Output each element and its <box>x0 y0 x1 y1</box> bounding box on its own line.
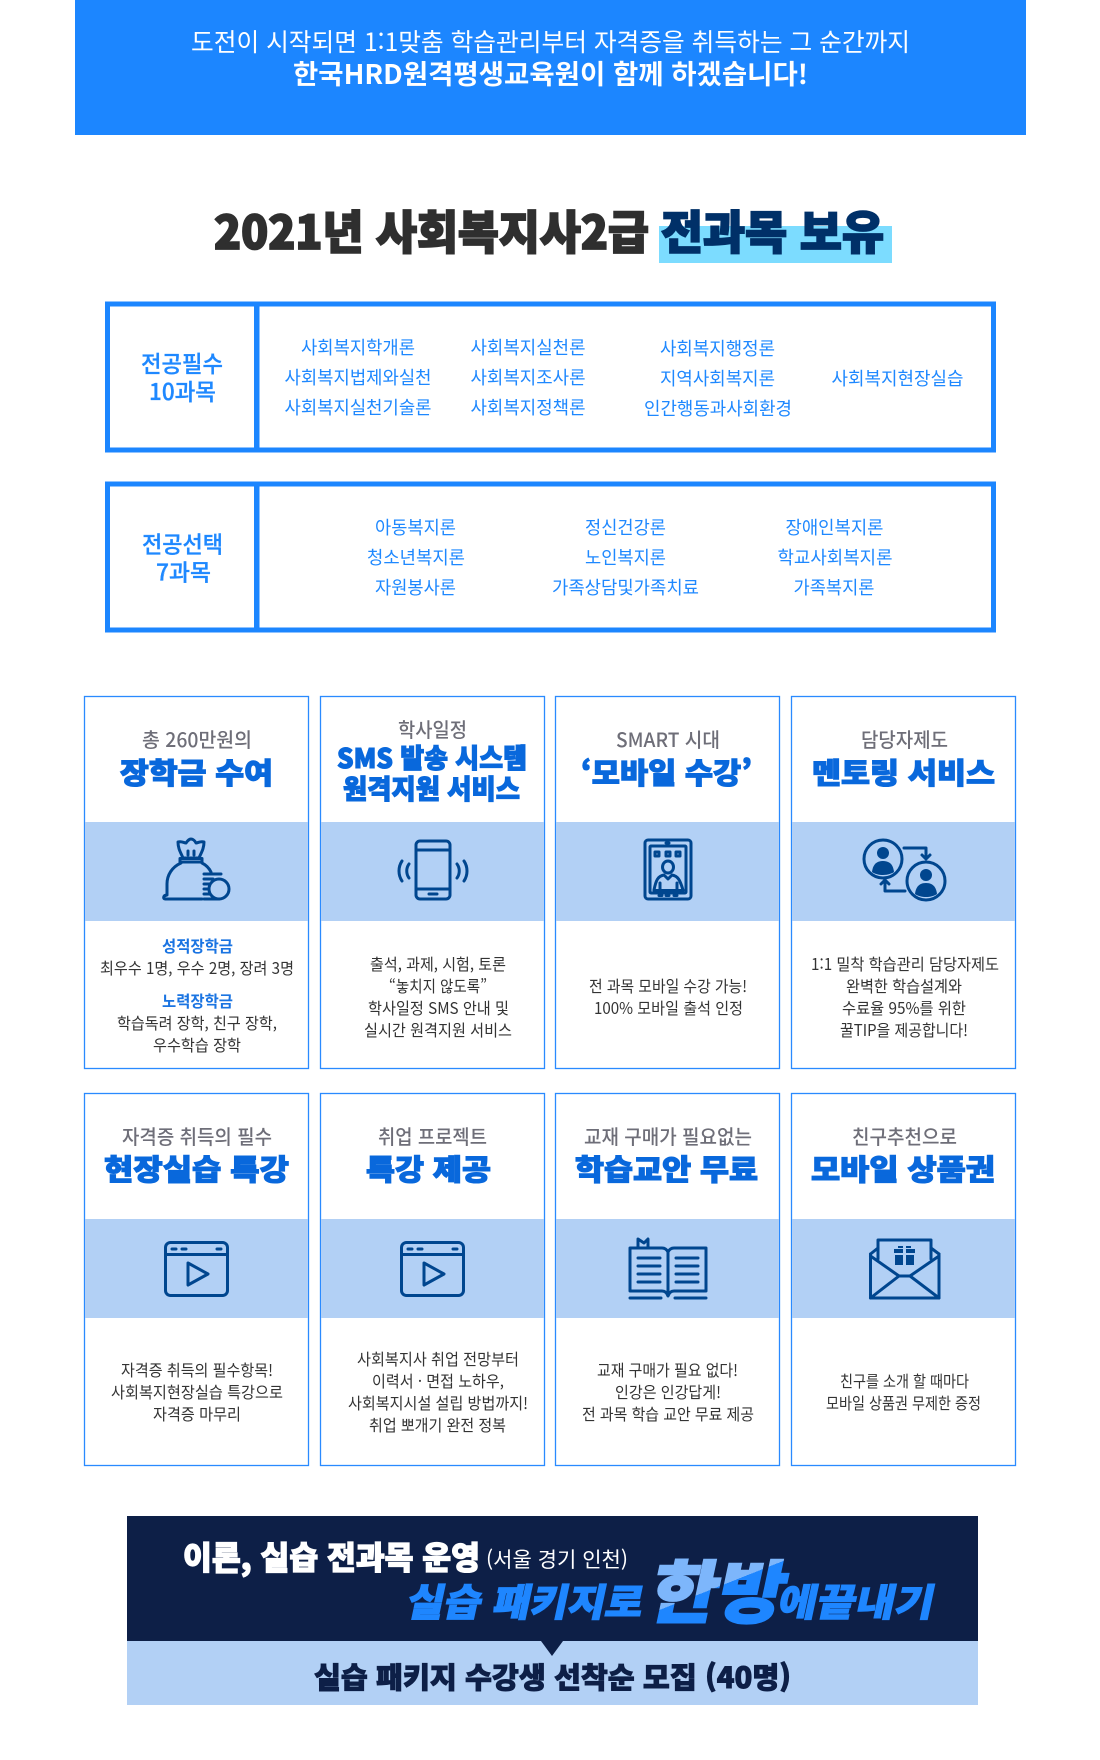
card heading: 자격증 취득의 필수 <box>122 1121 272 1150</box>
card heading: 총 260만원의 <box>142 724 252 753</box>
card body <box>582 1357 754 1425</box>
card body: 전 과목 학습 교안 무료 제공 <box>582 1401 754 1425</box>
subject list: required: 사회복지법제와실천 <box>284 364 432 390</box>
card body: 1:1 밀착 학습관리 담당자제도 <box>811 951 999 975</box>
subject list: required: 지역사회복지론 <box>660 365 775 391</box>
card heading: 모바일 상품권 <box>811 1147 995 1189</box>
subject list: required: 사회복지학개론 <box>301 334 415 360</box>
icon: mentor exchange <box>864 840 945 900</box>
label: elective: 전공선택 <box>142 526 223 560</box>
card body: 실시간 원격지원 서비스 <box>364 1017 512 1041</box>
card body: 인강은 인강답게! <box>615 1379 721 1403</box>
card body: 사회복지사 취업 전망부터 <box>357 1346 519 1370</box>
card heading: 멘토링 서비스 <box>812 750 995 792</box>
subject list: elective: 학교사회복지론 <box>778 544 892 570</box>
subject list: elective: 자원봉사론 <box>375 574 456 600</box>
card body: 노력장학금 <box>162 988 233 1012</box>
card heading: 담당자제도 <box>861 724 948 753</box>
callout headline: 이론, 실습 전과목 운영 <box>183 1533 480 1579</box>
subject list: elective: 아동복지론 <box>375 514 456 540</box>
icon: video player <box>166 1242 228 1296</box>
subject list: elective <box>367 514 892 600</box>
label: required: 10과목 <box>149 373 216 407</box>
icon: money bag <box>164 839 229 899</box>
card body: 이력서 · 면접 노하우, <box>372 1368 504 1392</box>
card body: 전 과목 모바일 수강 가능! <box>589 973 747 997</box>
card body <box>589 973 747 1019</box>
icon: tablet with person <box>645 840 691 899</box>
card: field practice lecture <box>84 1094 308 1466</box>
card: free study material <box>556 1094 780 1466</box>
icon: video player <box>402 1242 464 1296</box>
card body: 최우수 1명, 우수 2명, 장려 3명 <box>100 955 294 979</box>
card body <box>100 933 294 1056</box>
card: mentoring <box>792 696 1016 1068</box>
card heading <box>581 724 752 792</box>
subject list: required <box>284 334 964 421</box>
card heading: 장학금 수여 <box>120 750 273 792</box>
callout italic slogan: 한방 <box>643 1538 798 1637</box>
card body: 우수학습 장학 <box>153 1032 241 1056</box>
card heading <box>120 724 273 792</box>
card body <box>826 1368 981 1414</box>
subject list: elective: 청소년복지론 <box>367 544 465 570</box>
card: mobile gift voucher <box>792 1094 1016 1466</box>
title highlight <box>659 226 892 263</box>
callout italic slogan: 실습 패키지로 <box>402 1572 650 1628</box>
icon: envelope with gift <box>870 1240 939 1298</box>
label: elective: 7과목 <box>156 554 211 588</box>
label: required <box>141 345 223 407</box>
card body: 자격증 마무리 <box>153 1401 241 1425</box>
arrow: pointer down <box>541 1641 563 1656</box>
card heading: SMS 발송 시스템 <box>337 737 527 776</box>
card body: 친구를 소개 할 때마다 <box>840 1368 969 1392</box>
card body: 교재 구매가 필요 없다! <box>597 1357 738 1381</box>
callout recruitment line: 실습 패키지 수강생 선착순 모집 (40명) <box>314 1655 791 1697</box>
card heading: 교재 구매가 필요없는 <box>584 1121 752 1150</box>
callout italic slogan: 에끝내기 <box>773 1572 941 1628</box>
subject list: elective: 가족상담및가족치료 <box>552 574 699 600</box>
subject list: elective: 장애인복지론 <box>786 514 884 540</box>
top banner <box>75 0 1026 135</box>
subject list: elective: 노인복지론 <box>585 544 666 570</box>
card heading <box>575 1121 758 1189</box>
card heading <box>104 1121 289 1189</box>
title navy text: 전과목 보유 <box>661 197 884 263</box>
banner line 1: 도전이 시작되면 1:1맞춤 학습관리부터 자격증을 취득하는 그 순간까지 <box>191 23 910 59</box>
card heading <box>812 724 995 792</box>
subject list: required: 인간행동과사회환경 <box>644 395 792 421</box>
card body: 학사일정 SMS 안내 및 <box>368 995 509 1019</box>
card body <box>364 951 512 1041</box>
card body: 자격증 취득의 필수항목! <box>121 1357 273 1381</box>
card body: 학습독려 장학, 친구 장학, <box>117 1010 277 1034</box>
card heading: SMART 시대 <box>616 724 720 753</box>
card heading <box>337 714 527 807</box>
label: elective <box>142 526 223 588</box>
card body: 수료율 95%를 위한 <box>842 995 966 1019</box>
card heading: 취업 프로젝트 <box>378 1121 487 1150</box>
subject list: required: 사회복지실천론 <box>470 334 586 360</box>
subject list: required: 사회복지현장실습 <box>832 365 964 391</box>
panel: required subjects <box>108 304 994 451</box>
card body <box>811 951 999 1041</box>
card heading: 학사일정 <box>398 714 467 743</box>
callout region note: (서울 경기 인천) <box>486 1544 628 1574</box>
subject list: required: 사회복지조사론 <box>470 364 586 390</box>
card heading: 친구추천으로 <box>852 1121 957 1150</box>
card heading <box>811 1121 995 1189</box>
card heading: 특강 제공 <box>366 1147 491 1189</box>
callout italic slogan <box>402 1538 941 1637</box>
card: SMS system <box>320 696 544 1068</box>
panel: elective subjects <box>108 484 994 631</box>
icon: open book <box>630 1239 706 1298</box>
card heading: 학습교안 무료 <box>575 1147 758 1189</box>
card body: 완벽한 학습설계와 <box>846 973 962 997</box>
bottom callout <box>127 1516 978 1705</box>
subject list: elective: 정신건강론 <box>585 514 666 540</box>
subject list: required: 사회복지정책론 <box>470 394 586 420</box>
card body: “놓치지 않도록” <box>389 973 487 997</box>
card heading: 원격지원 서비스 <box>343 768 520 807</box>
card body: 모바일 상품권 무제한 증정 <box>826 1390 981 1414</box>
label: required: 전공필수 <box>141 345 223 379</box>
card body <box>111 1357 283 1425</box>
icon: smartphone <box>399 841 467 899</box>
card body: 출석, 과제, 시험, 토론 <box>370 951 506 975</box>
card body: 100% 모바일 출석 인정 <box>594 995 743 1019</box>
title dark text: 2021년 사회복지사2급 <box>214 197 649 263</box>
card body <box>348 1346 528 1436</box>
card heading: 현장실습 특강 <box>104 1147 289 1189</box>
card body: 사회복지시설 설립 방법까지! <box>348 1390 528 1414</box>
card heading <box>366 1121 491 1189</box>
card body: 성적장학금 <box>162 933 233 957</box>
title <box>214 197 892 263</box>
subject list: required: 사회복지행정론 <box>660 335 775 361</box>
card heading: ‘모바일 수강’ <box>581 750 752 792</box>
banner line 2: 한국HRD원격평생교육원이 함께 하겠습니다! <box>293 53 808 92</box>
card: scholarship <box>84 696 308 1068</box>
card: employment lecture <box>320 1094 544 1466</box>
subject list: required: 사회복지실천기술론 <box>284 394 432 420</box>
card body: 꿀TIP을 제공합니다! <box>840 1017 968 1041</box>
card: mobile learning <box>556 696 780 1068</box>
card body: 취업 뽀개기 완전 정복 <box>369 1412 506 1436</box>
card body: 사회복지현장실습 특강으로 <box>111 1379 283 1403</box>
subject list: elective: 가족복지론 <box>794 574 874 600</box>
